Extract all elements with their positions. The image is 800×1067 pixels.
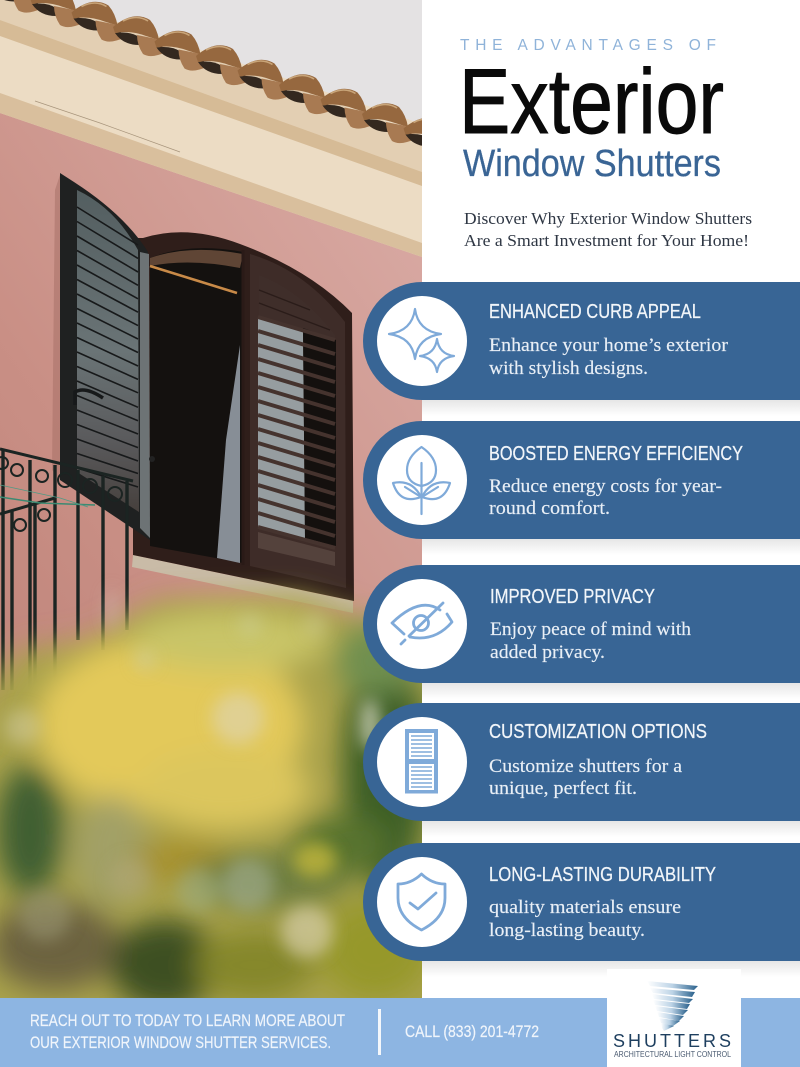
description	[489, 476, 722, 519]
subtitle: Are a Smart Investment for Your Home!	[464, 231, 749, 250]
description	[489, 756, 683, 799]
icon: crossed-out eye	[392, 603, 452, 644]
heading: ENHANCED CURB APPEAL	[489, 301, 701, 323]
wall	[0, 113, 422, 704]
kicker: THE ADVANTAGES OF	[460, 37, 716, 54]
panel: customization options	[363, 703, 800, 821]
icon: leaf plant	[393, 447, 450, 514]
description: Customize shutters for a	[489, 756, 683, 777]
description: with stylish designs.	[489, 358, 648, 379]
blurred foliage foreground	[0, 576, 422, 998]
right shutter	[250, 254, 346, 588]
description: round comfort.	[489, 498, 610, 519]
tagline: ARCHITECTURAL LIGHT CONTROL	[614, 1050, 731, 1059]
heading: BOOSTED ENERGY EFFICIENCY	[489, 443, 743, 465]
description	[490, 619, 692, 663]
left shutter	[52, 173, 155, 540]
description: Enjoy peace of mind with	[490, 619, 692, 640]
call to action text	[30, 1011, 345, 1052]
description	[489, 897, 681, 941]
icon: shutter	[405, 729, 438, 794]
description	[489, 335, 729, 379]
panel: enhanced curb appeal	[363, 282, 800, 400]
phone number: CALL (833) 201-4772	[405, 1022, 539, 1041]
description: unique, perfect fit.	[489, 778, 637, 799]
subtitle	[464, 209, 752, 250]
wordmark: SHUTTERS	[613, 1031, 731, 1051]
card shadows	[422, 400, 800, 977]
call to action text: REACH OUT TO TODAY TO LEARN MORE ABOUT	[30, 1011, 345, 1030]
eaves	[0, 0, 422, 257]
heading: IMPROVED PRIVACY	[490, 586, 655, 608]
description: long-lasting beauty.	[489, 920, 645, 941]
call to action text: OUR EXTERIOR WINDOW SHUTTER SERVICES.	[30, 1033, 331, 1052]
title block	[459, 37, 752, 250]
secondary title: Window Shutters	[463, 143, 721, 185]
balcony railing	[0, 449, 133, 690]
panel: boosted energy efficiency	[363, 421, 800, 539]
description: Enhance your home’s exterior	[489, 335, 729, 356]
footer band	[0, 998, 800, 1067]
window frame and sill	[132, 232, 354, 613]
description: added privacy.	[490, 642, 605, 663]
description: Reduce energy costs for year-	[489, 476, 722, 497]
icon: shield with check	[398, 874, 445, 930]
main title: Exterior	[459, 51, 724, 153]
subtitle: Discover Why Exterior Window Shutters	[464, 209, 752, 228]
sky	[52, 0, 422, 124]
window interior	[150, 248, 243, 563]
panel: improved privacy	[363, 565, 800, 683]
description: quality materials ensure	[489, 897, 681, 918]
panel: long-lasting durability	[363, 843, 800, 961]
icon: sparkles	[389, 309, 454, 372]
heading: LONG-LASTING DURABILITY	[489, 864, 716, 886]
photo: house with open window shutters	[0, 0, 422, 998]
heading: CUSTOMIZATION OPTIONS	[489, 721, 707, 743]
roof tiles	[4, 0, 422, 146]
icon: louvers	[647, 981, 698, 1031]
logo: Shutters Architectural Light Control	[607, 969, 741, 1067]
